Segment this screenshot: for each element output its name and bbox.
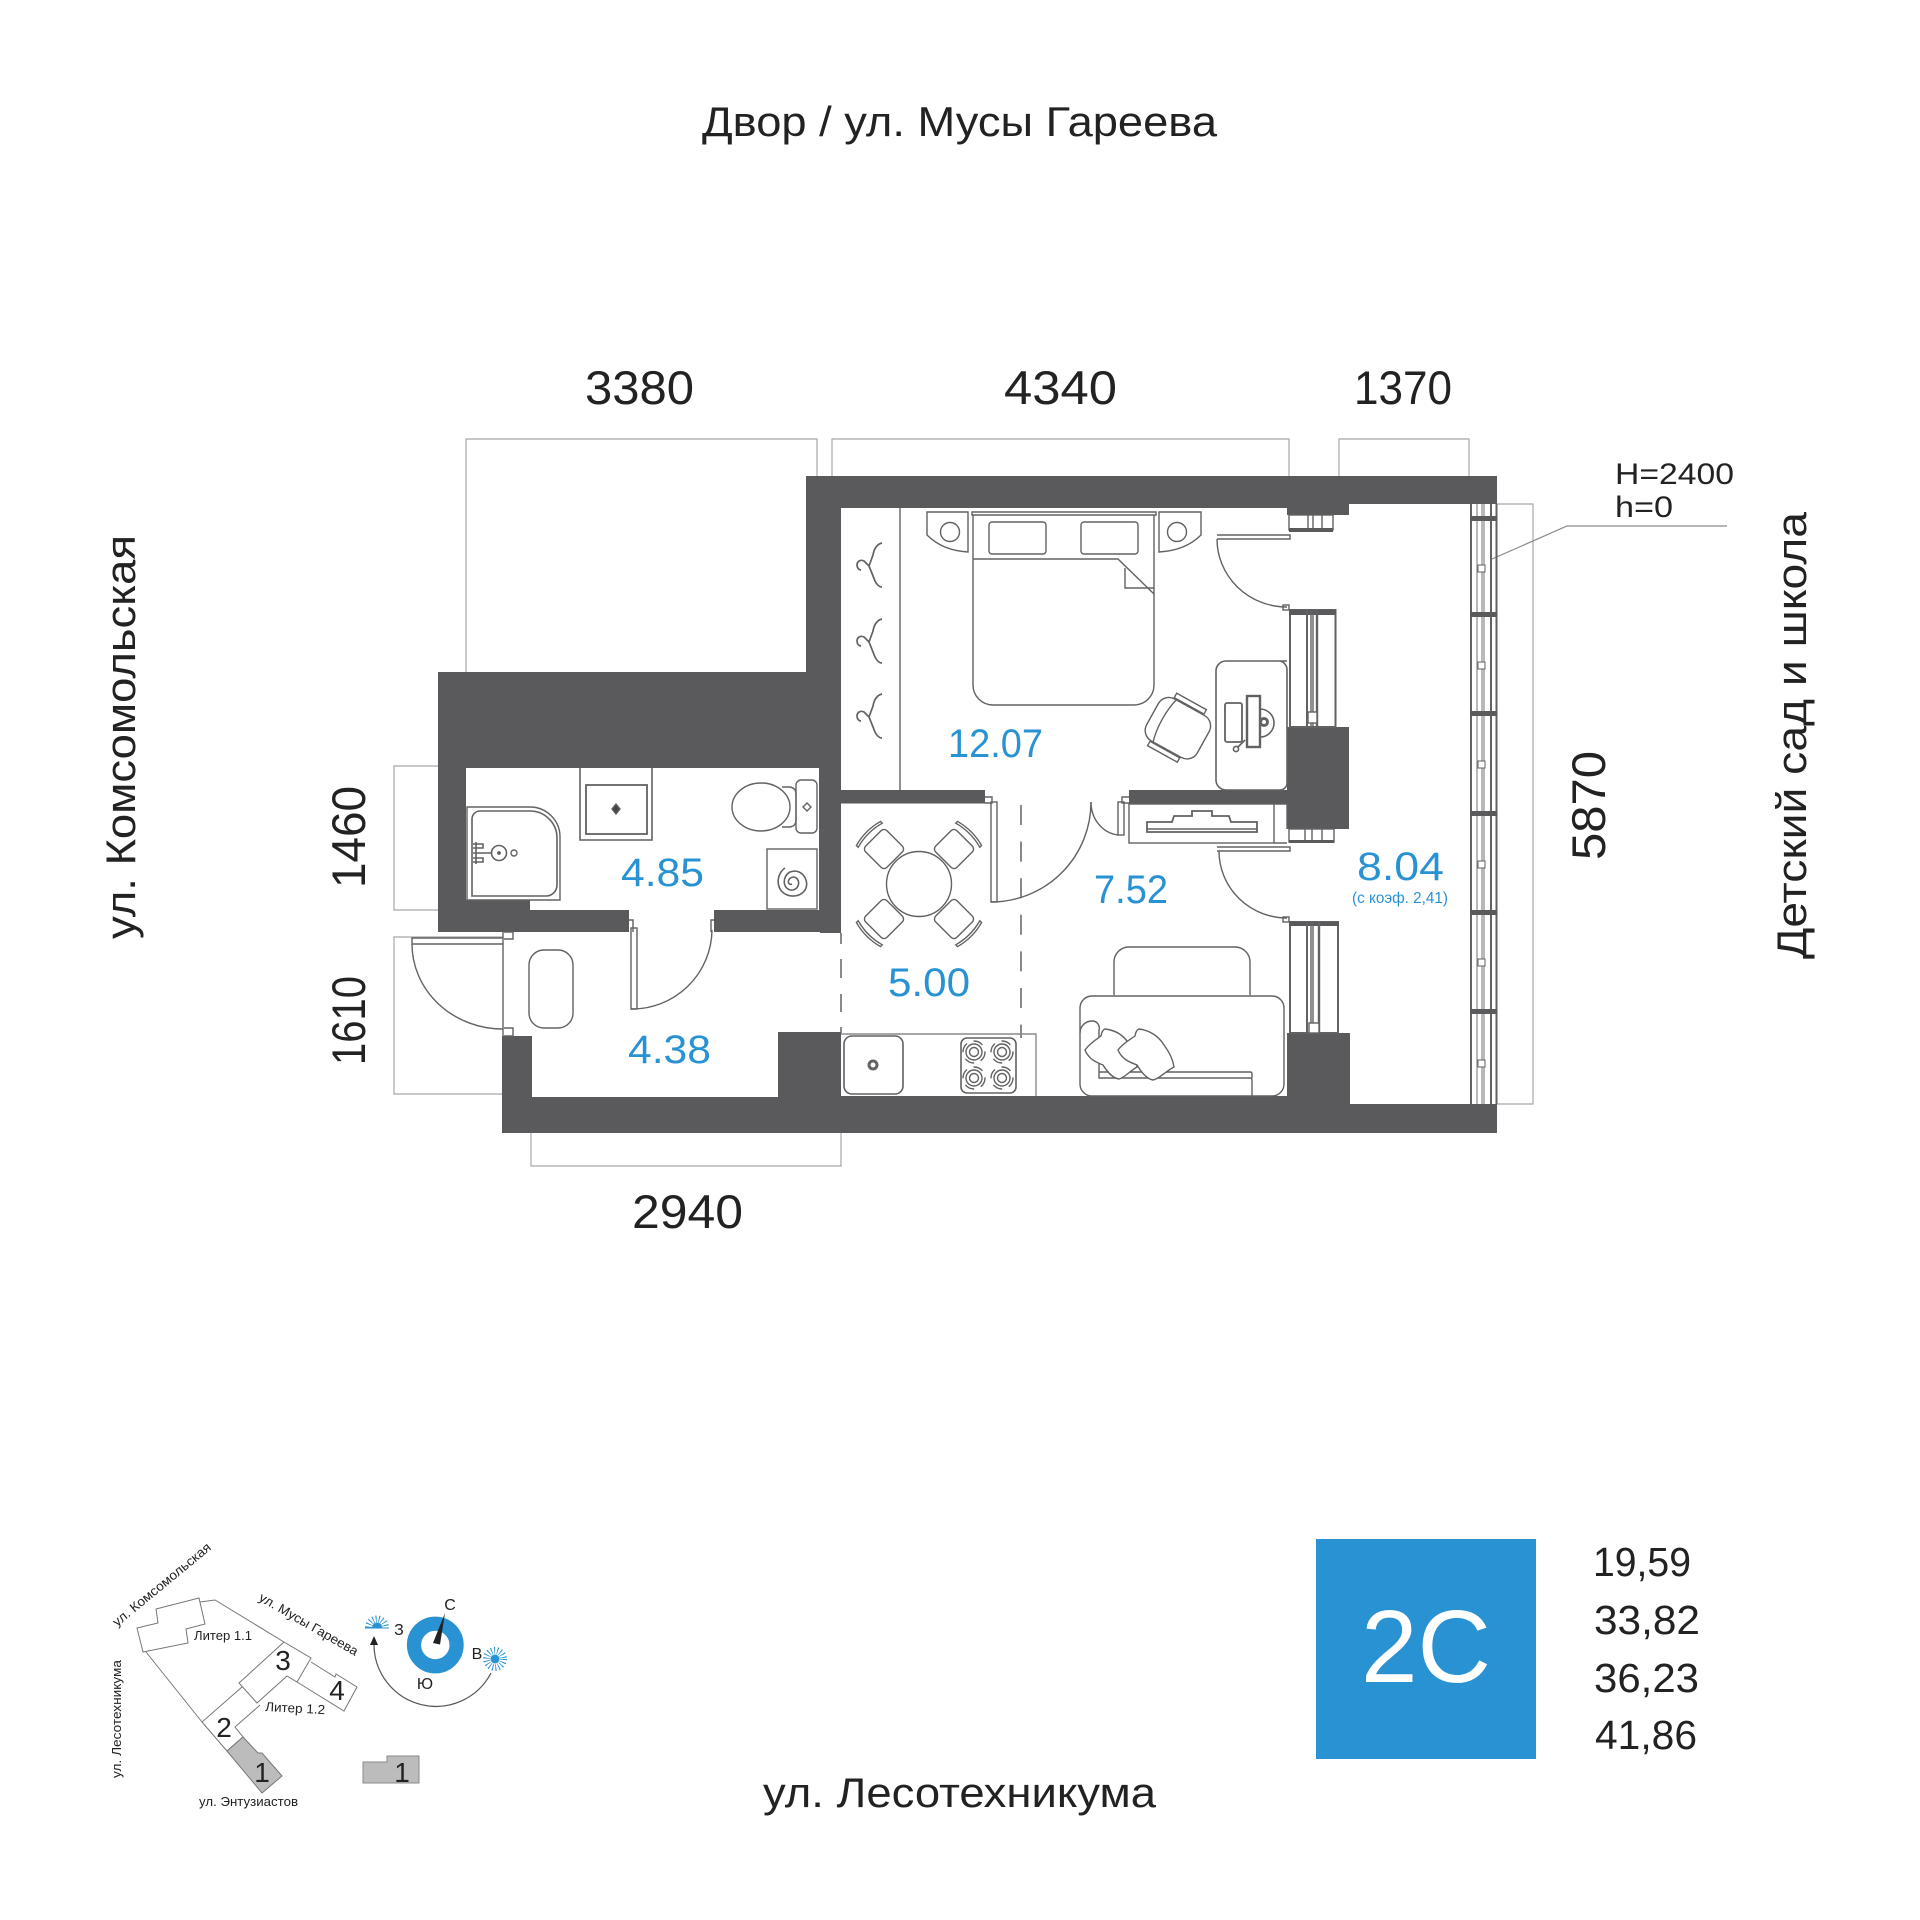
window: living room (1289, 922, 1339, 1033)
bed with bedside tables (927, 512, 1201, 705)
room areas: 5.00 (888, 961, 970, 1005)
bathroom door (629, 920, 714, 1009)
office chair (1138, 688, 1218, 768)
site plan: 4 (329, 1675, 345, 1706)
balcony height callout: h=0 (1615, 491, 1673, 524)
compass: Ю (417, 1676, 433, 1693)
bathroom sink (580, 768, 652, 840)
dimension labels: 3380 (585, 361, 694, 414)
dimension labels: 1460 (322, 786, 375, 888)
site plan labels: ул. Энтузиастов (199, 1794, 298, 1809)
TV stand (1129, 804, 1287, 843)
dimension lines (394, 439, 1533, 1166)
desk with computer (1216, 661, 1287, 790)
room areas: 7.52 (1094, 868, 1168, 912)
room areas (621, 722, 1448, 1072)
dimension labels (322, 361, 1615, 1238)
interior double door (985, 797, 1129, 902)
balcony railing (1470, 504, 1497, 1104)
room areas: 4.85 (621, 851, 704, 895)
area values: 19,59 (1593, 1539, 1691, 1585)
room areas: (с коэф. 2,41) (1352, 890, 1448, 907)
entrance door (412, 932, 513, 1036)
wardrobe with hangers (857, 508, 900, 790)
balcony height callout: H=2400 (1615, 458, 1734, 491)
hall bench (529, 950, 573, 1028)
dimension labels: 1370 (1354, 361, 1452, 414)
legend: building 1 (363, 1756, 419, 1788)
dimension labels: 1610 (322, 976, 375, 1065)
building 1 highlight (227, 1737, 282, 1793)
label: Komsomolskaya street: ул. Комсомольская (97, 535, 144, 939)
sofa with cushions (1080, 947, 1284, 1096)
zone dashed lines (841, 805, 1021, 1038)
area values: 36,23 (1594, 1655, 1699, 1701)
toilet (732, 780, 817, 833)
dimension labels: 4340 (1004, 361, 1117, 414)
door: bedroom balcony top (1217, 515, 1333, 610)
water heater with spiral (767, 849, 817, 909)
room areas: 4.38 (628, 1028, 711, 1072)
walls (438, 476, 1497, 1133)
room areas: 12.07 (948, 722, 1043, 766)
balcony height callout (1492, 458, 1734, 559)
door: balcony lower (1217, 829, 1334, 922)
window: bedroom (1289, 610, 1336, 727)
apartment type badge (1316, 1539, 1536, 1759)
dimension labels: 2940 (632, 1185, 743, 1238)
site plan labels: Литер 1.2 (265, 1699, 326, 1717)
bathroom shower (467, 807, 560, 900)
site plan labels: ул. Комсомольская (109, 1540, 214, 1629)
legend: building 1: 1 (394, 1757, 410, 1788)
site plan labels: Литер 1.1 (194, 1628, 252, 1643)
room areas: 8.04 (1357, 845, 1444, 889)
compass: З (394, 1622, 404, 1639)
site plan: 2 (216, 1712, 232, 1743)
compass: В (472, 1646, 482, 1663)
dining table with chairs (855, 820, 983, 948)
area values: 41,86 (1595, 1712, 1697, 1758)
dimension labels: 5870 (1562, 751, 1615, 860)
title: yard side street: Двор / ул. Мусы Гареева (702, 98, 1218, 145)
site plan labels: ул. Мусы Гареева (256, 1590, 362, 1659)
site plan labels: ул. Лесотехникума (109, 1659, 124, 1778)
area values: 33,82 (1594, 1597, 1700, 1643)
site plan (109, 1540, 362, 1809)
site plan: 3 (275, 1645, 291, 1676)
label: Lesotekhnikuma street: ул. Лесотехникума (763, 1769, 1157, 1816)
compass (365, 1597, 504, 1706)
compass: С (444, 1597, 456, 1614)
site plan labels (109, 1540, 362, 1809)
apartment type badge: 2С (1361, 1589, 1491, 1704)
site plan: 1 (254, 1757, 270, 1788)
label: kindergarten and school: Детский сад и школа (1768, 511, 1815, 959)
area values (1593, 1539, 1700, 1758)
kitchen counter with sink and cooktop (841, 1034, 1036, 1096)
